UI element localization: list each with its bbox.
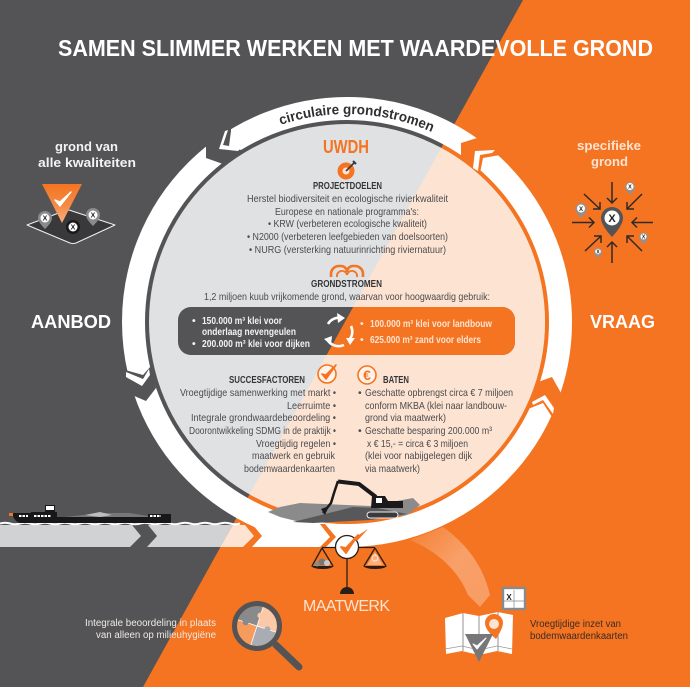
text block: success factors: maatwerk en gebruik — [252, 450, 336, 462]
text block: project goals: Europese en nationale programma's: — [275, 206, 419, 218]
supply volumes: 150.000 m³ klei voor — [202, 315, 282, 327]
text block: early use of soil value maps: bodemwaardenkaarten — [530, 631, 628, 642]
text block: project goals: PROJECTDOELEN — [313, 181, 382, 192]
icon: converging arrows on pin — [572, 182, 653, 263]
icon: calendar table — [503, 588, 525, 609]
text block: project goals: Herstel biodiversiteit en ecologische rivierkwaliteit — [247, 193, 448, 205]
label: supply: AANBOD — [31, 312, 111, 332]
ring: circular soil flows — [118, 108, 575, 536]
icon: target — [338, 161, 356, 180]
text block: project goals: • NURG (versterking natuurinrichting riviernatuur) — [249, 244, 446, 256]
heading: custom work: MAATWERK — [303, 598, 390, 615]
arrow cut: lower right — [528, 377, 575, 422]
text block: soil flows — [204, 279, 490, 303]
text block: benefits: • — [358, 387, 362, 399]
icon: calendar table: X — [506, 593, 512, 602]
supply volumes — [192, 315, 310, 350]
central disc — [149, 124, 545, 508]
water line — [0, 523, 240, 524]
transport strip with chevrons — [0, 525, 347, 547]
text block: soil of all qualities: alle kwaliteiten — [38, 155, 136, 170]
text block: benefits: grond via maatwerk) — [365, 412, 446, 424]
text block: soil of all qualities: grond van — [55, 139, 118, 154]
text block: benefits: (klei voor nabijgelegen dijk — [365, 450, 473, 462]
arrow cut: lower left — [118, 366, 156, 401]
text block: success factors: Vroegtijdig regelen • — [256, 438, 336, 450]
text block: specific soil: specifieke — [577, 138, 641, 153]
ring label: circulaire grondstromen — [280, 105, 434, 132]
icon: soil field with pins: X — [71, 224, 76, 232]
icon: converging arrows on pin: X — [642, 234, 646, 240]
text block: success factors: Vroegtijdige samenwerking met markt • — [180, 387, 336, 399]
icon: magnifier with puzzle — [229, 598, 299, 667]
text block: soil flows: 1,2 miljoen kuub vrijkomende grond, waarvan voor hoogwaardig gebruik: — [204, 291, 490, 303]
text block: project goals: • KRW (verbeteren ecologische kwaliteit) — [268, 218, 427, 230]
icon: soil field with pins — [27, 184, 115, 244]
text block: specific soil: grond — [591, 154, 628, 169]
text block: integral assessment: van alleen op milieuhygiëne — [96, 630, 216, 641]
icon: euro — [358, 366, 376, 384]
illustration: flow arrow to map — [410, 527, 490, 607]
text block: specific soil — [577, 138, 641, 169]
demand volumes: 625.000 m³ zand voor elders — [370, 334, 481, 346]
text block: soil of all qualities — [38, 139, 136, 170]
icon: converging arrows on pin: X — [579, 207, 583, 213]
arrow cut: upper right — [461, 132, 510, 173]
demand volumes — [360, 318, 493, 346]
icon: soil field with pins: X — [43, 216, 48, 222]
demand volumes: 100.000 m³ klei voor landbouw — [370, 318, 493, 330]
supply volumes: 200.000 m³ klei voor dijken — [202, 338, 310, 350]
icon: soil field with pins: X — [91, 212, 96, 220]
text block: integral assessment: Integrale beoordeling in plaats — [85, 618, 216, 629]
icon: converging arrows on pin: X — [596, 250, 600, 256]
icon: euro: € — [363, 367, 371, 383]
supply volumes: • — [192, 338, 196, 350]
text block: benefits: Geschatte opbrengst circa € 7 miljoen — [365, 387, 513, 399]
text block: benefits: BATEN — [383, 375, 409, 386]
label: demand: VRAAG — [590, 312, 655, 332]
text block: early use of soil value maps: Vroegtijdige inzet van — [530, 619, 621, 630]
text block: early use of soil value maps — [530, 619, 628, 642]
icon: converging arrows on pin: X — [628, 184, 632, 190]
demand volumes: • — [360, 318, 364, 330]
icon: success check — [318, 365, 336, 383]
text block: success factors: SUCCESFACTOREN — [229, 375, 305, 386]
chevrons on the ring bottom — [320, 524, 336, 547]
text block: benefits — [358, 375, 513, 475]
text block: benefits: • — [358, 425, 362, 437]
icon: converging arrows on pin: X — [608, 213, 616, 225]
demand volumes: • — [360, 334, 364, 346]
text block: success factors: bodemwaardenkaarten — [244, 463, 335, 475]
icon: cycle arrows — [324, 313, 355, 346]
panel: supply and demand volumes — [178, 307, 515, 355]
text block: benefits: conform MKBA (klei naar landbouw- — [365, 400, 507, 412]
text block: benefits: Geschatte besparing 200.000 m³ — [365, 425, 492, 437]
text block: integral assessment — [85, 618, 216, 641]
illustration: excavator on soil mound — [268, 481, 420, 523]
text block: benefits: via maatwerk) — [365, 463, 420, 475]
icon: balance scale — [311, 529, 387, 594]
title: SAMEN SLIMMER WERKEN MET WAARDEVOLLE GROND — [58, 35, 653, 61]
supply volumes: onderlaag nevengeulen — [202, 326, 296, 338]
text block: success factors: Leerruimte • — [287, 400, 336, 412]
illustration: barge — [9, 505, 171, 523]
text block: project goals — [247, 181, 448, 256]
text block: project goals: • N2000 (verbeteren leefgebieden van doelsoorten) — [247, 231, 448, 243]
heading: UWDH: UWDH — [323, 137, 369, 157]
supply volumes: • — [192, 315, 196, 327]
text block: success factors — [180, 375, 336, 475]
text block: success factors: Integrale grondwaardebeoordeling • — [191, 412, 336, 424]
text block: soil flows: GRONDSTROMEN — [311, 279, 382, 290]
icon: folded map with pin and marker — [445, 612, 513, 662]
icon: soil flows — [331, 266, 363, 277]
text block: success factors: Doorontwikkeling SDMG in de praktijk • — [189, 425, 336, 437]
arrow cut: upper left — [200, 122, 244, 164]
text block: benefits: x € 15,- = circa € 3 miljoen — [367, 438, 468, 450]
